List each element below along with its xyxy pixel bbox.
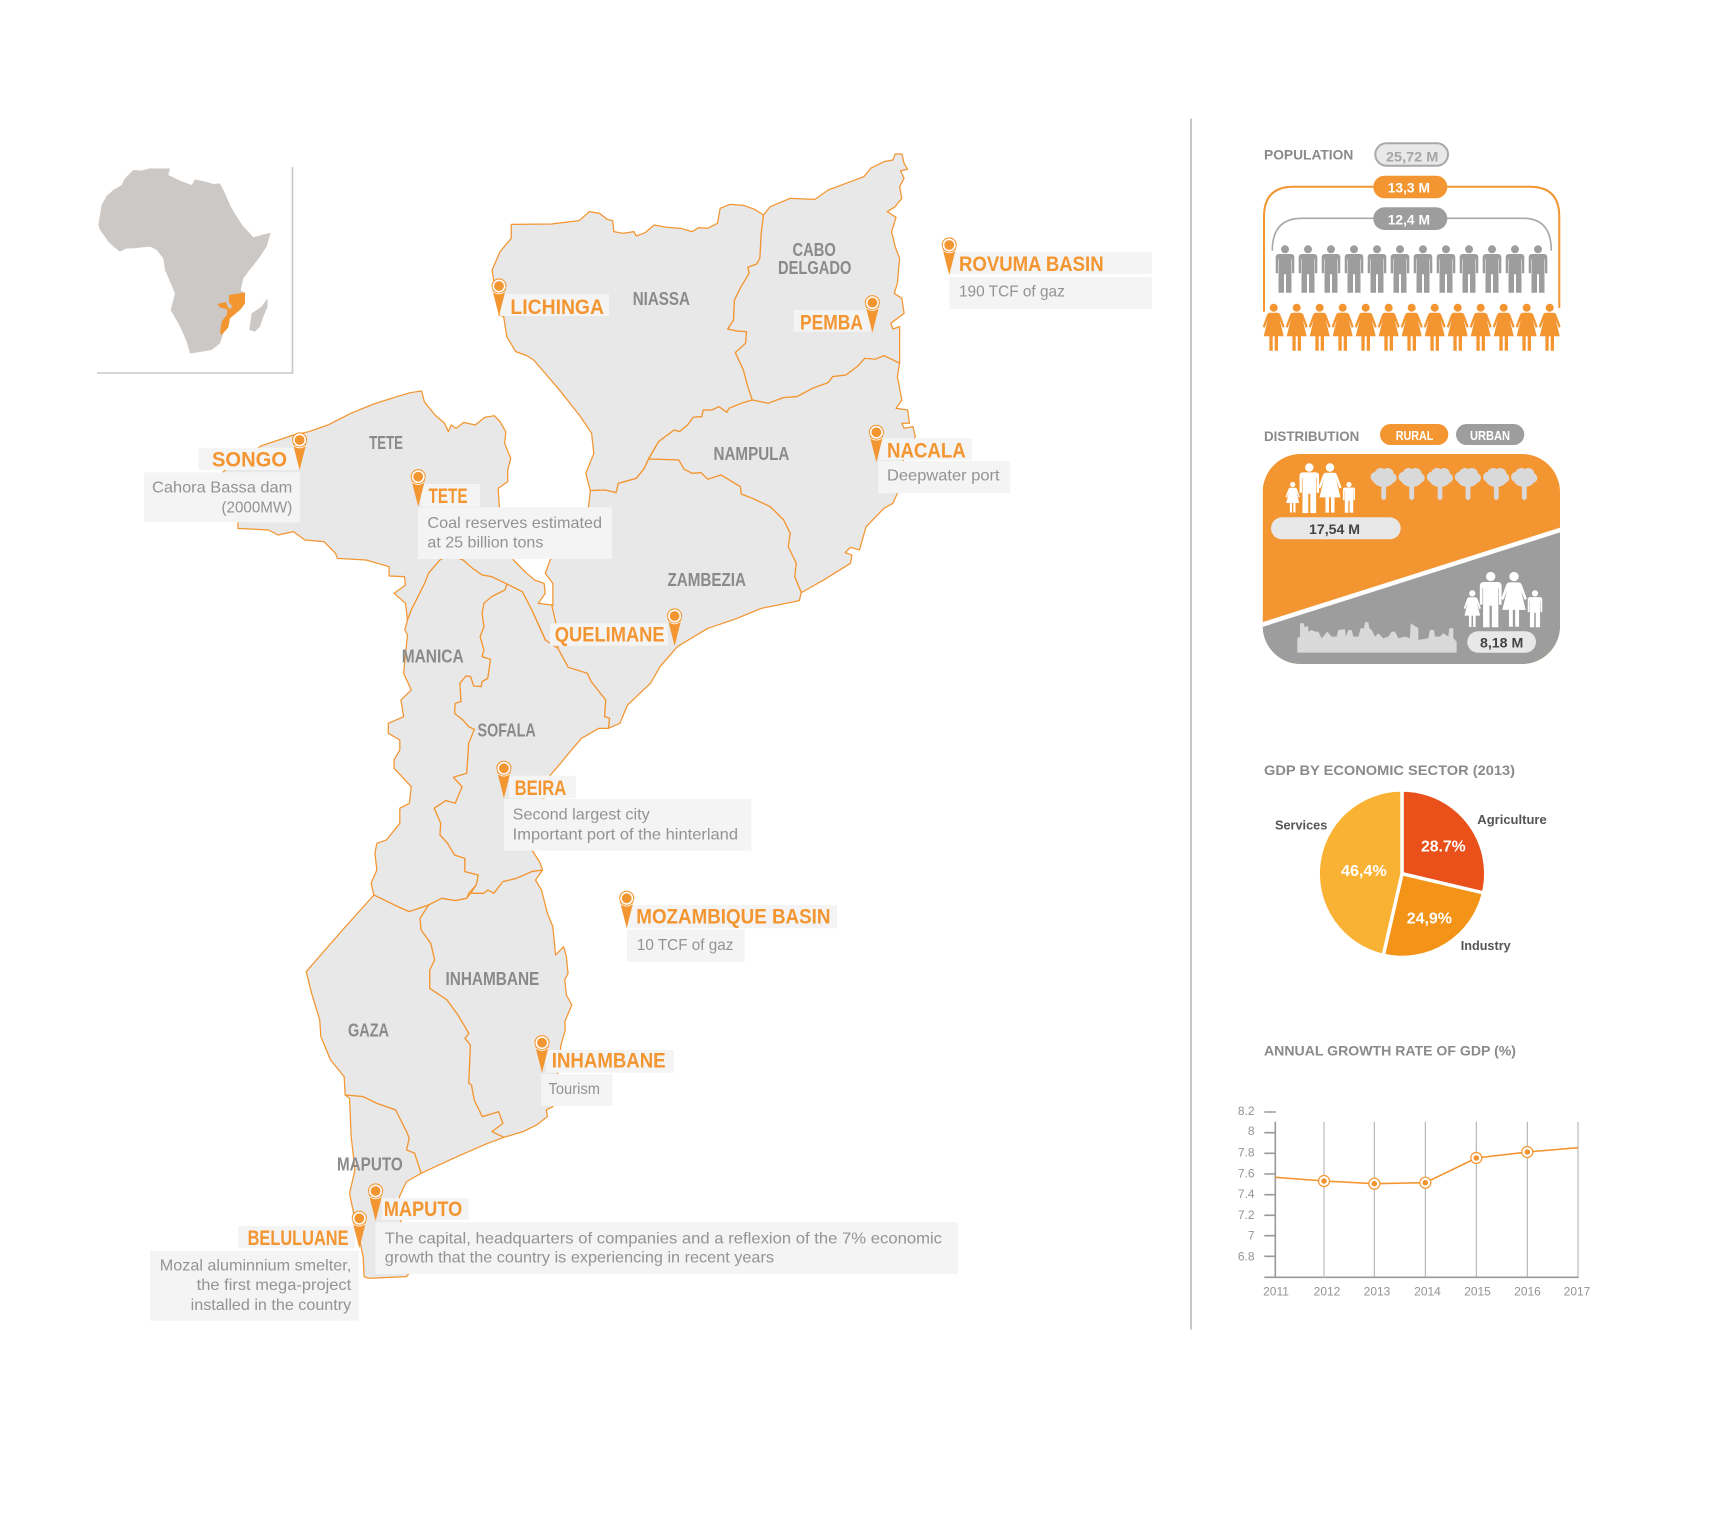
callout: Maputo: The capital, headquarters of companies and a reflexion of the 7% economic [385, 1230, 942, 1247]
urban population pill: 8,18 M [1480, 635, 1523, 651]
callout: Beira: Second largest city [513, 806, 650, 823]
label: Nampula: NAMPULA [714, 443, 789, 464]
total population pill: 25,72 M [1386, 148, 1438, 164]
heading: annual growth: ANNUAL GROWTH RATE OF GDP (%) [1264, 1043, 1516, 1059]
Madagascar [249, 298, 268, 332]
y axis labels: 8.2 [1238, 1104, 1255, 1118]
panel: annual growth rate [1238, 1043, 1591, 1299]
callout: Tete: at 25 billion tons [427, 534, 543, 551]
callout: Songo [144, 432, 307, 522]
inset frame [97, 167, 292, 373]
callout: Maputo: MAPUTO [384, 1198, 462, 1221]
pie chart [1318, 790, 1486, 957]
callout: Mozambique Basin: MOZAMBIQUE BASIN [636, 905, 830, 928]
label: Niassa: NIASSA [633, 288, 690, 309]
province: Maputo [345, 1095, 421, 1278]
x axis labels: 2014 [1414, 1285, 1441, 1299]
men icon row [1276, 245, 1547, 293]
x axis labels: 2012 [1314, 1285, 1341, 1299]
callout: Quelimane: QUELIMANE [555, 624, 665, 647]
value: agriculture: 28.7% [1421, 839, 1466, 856]
callout: Beira: Important port of the hinterland [513, 826, 738, 843]
city skyline [1297, 622, 1457, 653]
label: Cabo Delgado: CABO [792, 239, 836, 260]
urban population pill [1467, 631, 1536, 653]
men count pill [1373, 207, 1447, 230]
province: Niassa [492, 204, 763, 493]
y axis labels: 8 [1248, 1124, 1255, 1138]
line chart [1264, 1112, 1579, 1277]
province: Sofala [434, 584, 610, 893]
y axis labels: 6.8 [1238, 1249, 1255, 1263]
panel: GDP by sector [1264, 762, 1547, 957]
legend: rural [1380, 424, 1448, 445]
callout: Nacala [869, 425, 1010, 493]
women count pill [1373, 176, 1447, 198]
callout: Songo: Cahora Bassa dam [152, 480, 292, 497]
x axis labels: 2017 [1564, 1285, 1591, 1299]
callout: Nacala: NACALA [887, 439, 966, 462]
province: Tete [187, 391, 558, 648]
men count pill: 12,4 M [1388, 211, 1430, 227]
y axis labels: 7.4 [1238, 1187, 1255, 1201]
callout: Pemba [794, 295, 880, 334]
legend: rural: RURAL [1396, 428, 1433, 443]
heading: GDP by sector: GDP BY ECONOMIC SECTOR (2013) [1264, 762, 1515, 778]
label: industry: Industry [1461, 938, 1511, 953]
callout: Rovuma Basin: ROVUMA BASIN [959, 253, 1104, 276]
inset: Africa locator map [97, 167, 292, 373]
value: services: 46,4% [1341, 863, 1387, 880]
total population pill [1375, 143, 1448, 166]
x axis labels [1263, 1285, 1591, 1299]
legend: urban: URBAN [1470, 428, 1510, 443]
label: agriculture: Agriculture [1477, 812, 1547, 827]
label: services: Services [1275, 817, 1327, 832]
women icon row [1263, 304, 1561, 351]
callout: Beluluane: the first mega-project [197, 1277, 352, 1294]
callout: Lichinga: LICHINGA [510, 296, 604, 319]
legend: urban [1456, 424, 1524, 445]
callout: Maputo: growth that the country is experiencing in recent years [385, 1249, 774, 1266]
callout: Inhambane: Tourism [548, 1081, 600, 1098]
callout: Rovuma Basin: 190 TCF of gaz [959, 284, 1065, 301]
callout: Mozambique Basin [619, 891, 837, 962]
callout: Inhambane: INHAMBANE [552, 1050, 666, 1073]
callout: Beira [496, 761, 751, 851]
rural and urban split panel [1262, 454, 1561, 664]
rural family icon [1286, 463, 1355, 513]
y axis labels: 7.2 [1238, 1208, 1255, 1222]
callout: Inhambane [534, 1035, 674, 1106]
rural population pill: 17,54 M [1309, 521, 1360, 537]
x axis labels: 2011 [1263, 1285, 1289, 1299]
callout: Beira: BEIRA [515, 777, 566, 800]
panel: distribution [1262, 424, 1561, 664]
callout: Beluluane: Mozal aluminnium smelter, [160, 1258, 351, 1275]
value: industry: 24,9% [1407, 910, 1452, 927]
province: Inhambane [420, 870, 572, 1137]
callout: Pemba: PEMBA [800, 311, 863, 334]
map: Mozambique provinces [187, 154, 915, 1278]
y axis labels [1238, 1104, 1255, 1263]
label: Manica: MANICA [402, 646, 464, 667]
orange bracket: women [1264, 187, 1559, 312]
y axis labels: 7.8 [1238, 1145, 1255, 1159]
heading: distribution: DISTRIBUTION [1264, 428, 1359, 444]
Mozambique highlight [217, 292, 245, 335]
x axis labels: 2016 [1514, 1285, 1541, 1299]
grey bracket: men [1272, 218, 1551, 251]
y axis labels: 7 [1248, 1229, 1255, 1243]
province: Cabo Delgado [728, 154, 908, 403]
province: Manica [371, 555, 507, 912]
heading: population: POPULATION [1264, 146, 1353, 162]
callout: Maputo [368, 1183, 958, 1274]
callout: Tete [411, 469, 612, 559]
urban family icon [1464, 572, 1542, 627]
label: Cabo Delgado: DELGADO [778, 257, 851, 278]
province name labels [337, 239, 851, 1175]
label: Zambezia: ZAMBEZIA [668, 569, 746, 590]
label: Sofala: SOFALA [478, 720, 536, 741]
callout: Lichinga [491, 278, 609, 319]
callout: Beluluane: installed in the country [191, 1297, 351, 1314]
province: Gaza [306, 895, 504, 1173]
label: Cabo Delgado [778, 239, 851, 278]
callout: Rovuma Basin [942, 237, 1152, 309]
callout: Tete: TETE [428, 485, 468, 508]
province: Zambezia [545, 459, 801, 728]
province: Nampula [649, 356, 915, 593]
rural population pill [1271, 517, 1401, 539]
label: Gaza: GAZA [348, 1020, 389, 1041]
y axis labels: 7.6 [1238, 1166, 1255, 1180]
trees [1370, 468, 1537, 500]
callout: Mozambique Basin: 10 TCF of gaz [637, 937, 733, 954]
label: Inhambane: INHAMBANE [446, 968, 539, 989]
women count pill: 13,3 M [1388, 180, 1430, 196]
callout: Beluluane [150, 1211, 367, 1321]
x axis labels: 2013 [1364, 1285, 1391, 1299]
Africa continent [98, 168, 271, 353]
callout: Nacala: Deepwater port [887, 468, 1000, 485]
callout: Tete: Coal reserves estimated [427, 515, 602, 532]
callout: Songo: (2000MW) [222, 500, 292, 517]
label: Tete: TETE [369, 432, 403, 453]
label: Maputo: MAPUTO [337, 1154, 403, 1175]
callout: Songo: SONGO [212, 448, 287, 472]
callout: Beluluane: BELULUANE [248, 1227, 348, 1250]
callout: Quelimane [550, 608, 682, 647]
x axis labels: 2015 [1464, 1285, 1491, 1299]
panel: population [1263, 143, 1561, 351]
